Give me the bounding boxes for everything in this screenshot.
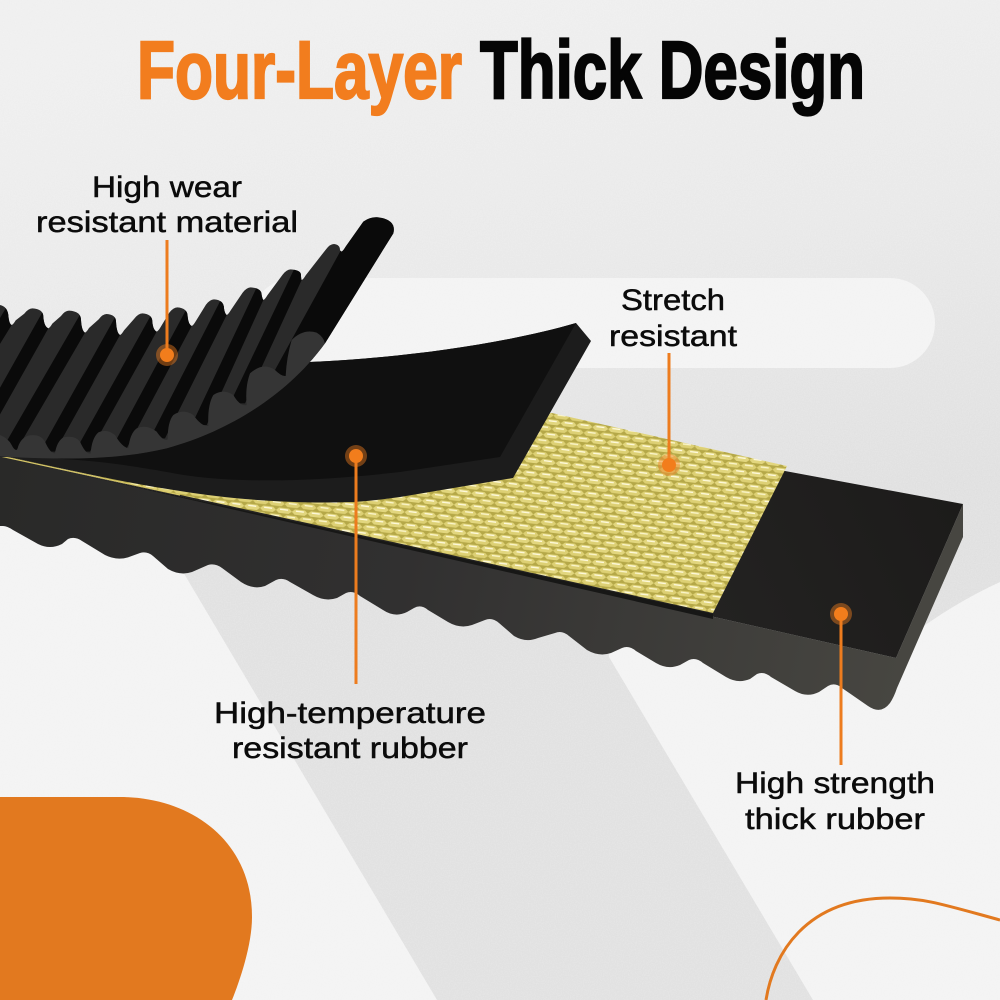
title (137, 25, 865, 116)
callout: high wear resistant material (36, 171, 298, 366)
groove shadows (0, 253, 302, 452)
callout: high-temperature resistant rubber: High-temperature (214, 697, 486, 730)
callout: stretch resistant (609, 284, 738, 476)
callout: high wear resistant material: resistant material (36, 206, 298, 239)
orange curved line (766, 898, 1000, 1000)
callout: stretch resistant: Stretch (621, 284, 725, 317)
orange blob (0, 797, 252, 1000)
callout: high strength thick rubber: thick rubber (745, 803, 925, 836)
callout: high strength thick rubber: High strength (735, 767, 935, 800)
yellow woven layer (0, 413, 787, 613)
callout: stretch resistant: resistant (609, 320, 738, 353)
bottom rubber belt layer (0, 452, 963, 710)
callout: high wear resistant material: High wear (92, 171, 242, 204)
toothed top belt layer (0, 217, 394, 458)
callout: high strength thick rubber (735, 603, 935, 836)
black flap layer (0, 323, 591, 502)
title: Four-Layer (137, 25, 462, 116)
callout: high-temperature resistant rubber (214, 445, 486, 765)
callout: high-temperature resistant rubber: resistant rubber (232, 732, 468, 765)
yellow edge highlight (0, 456, 180, 495)
title: Thick Design (480, 25, 865, 116)
